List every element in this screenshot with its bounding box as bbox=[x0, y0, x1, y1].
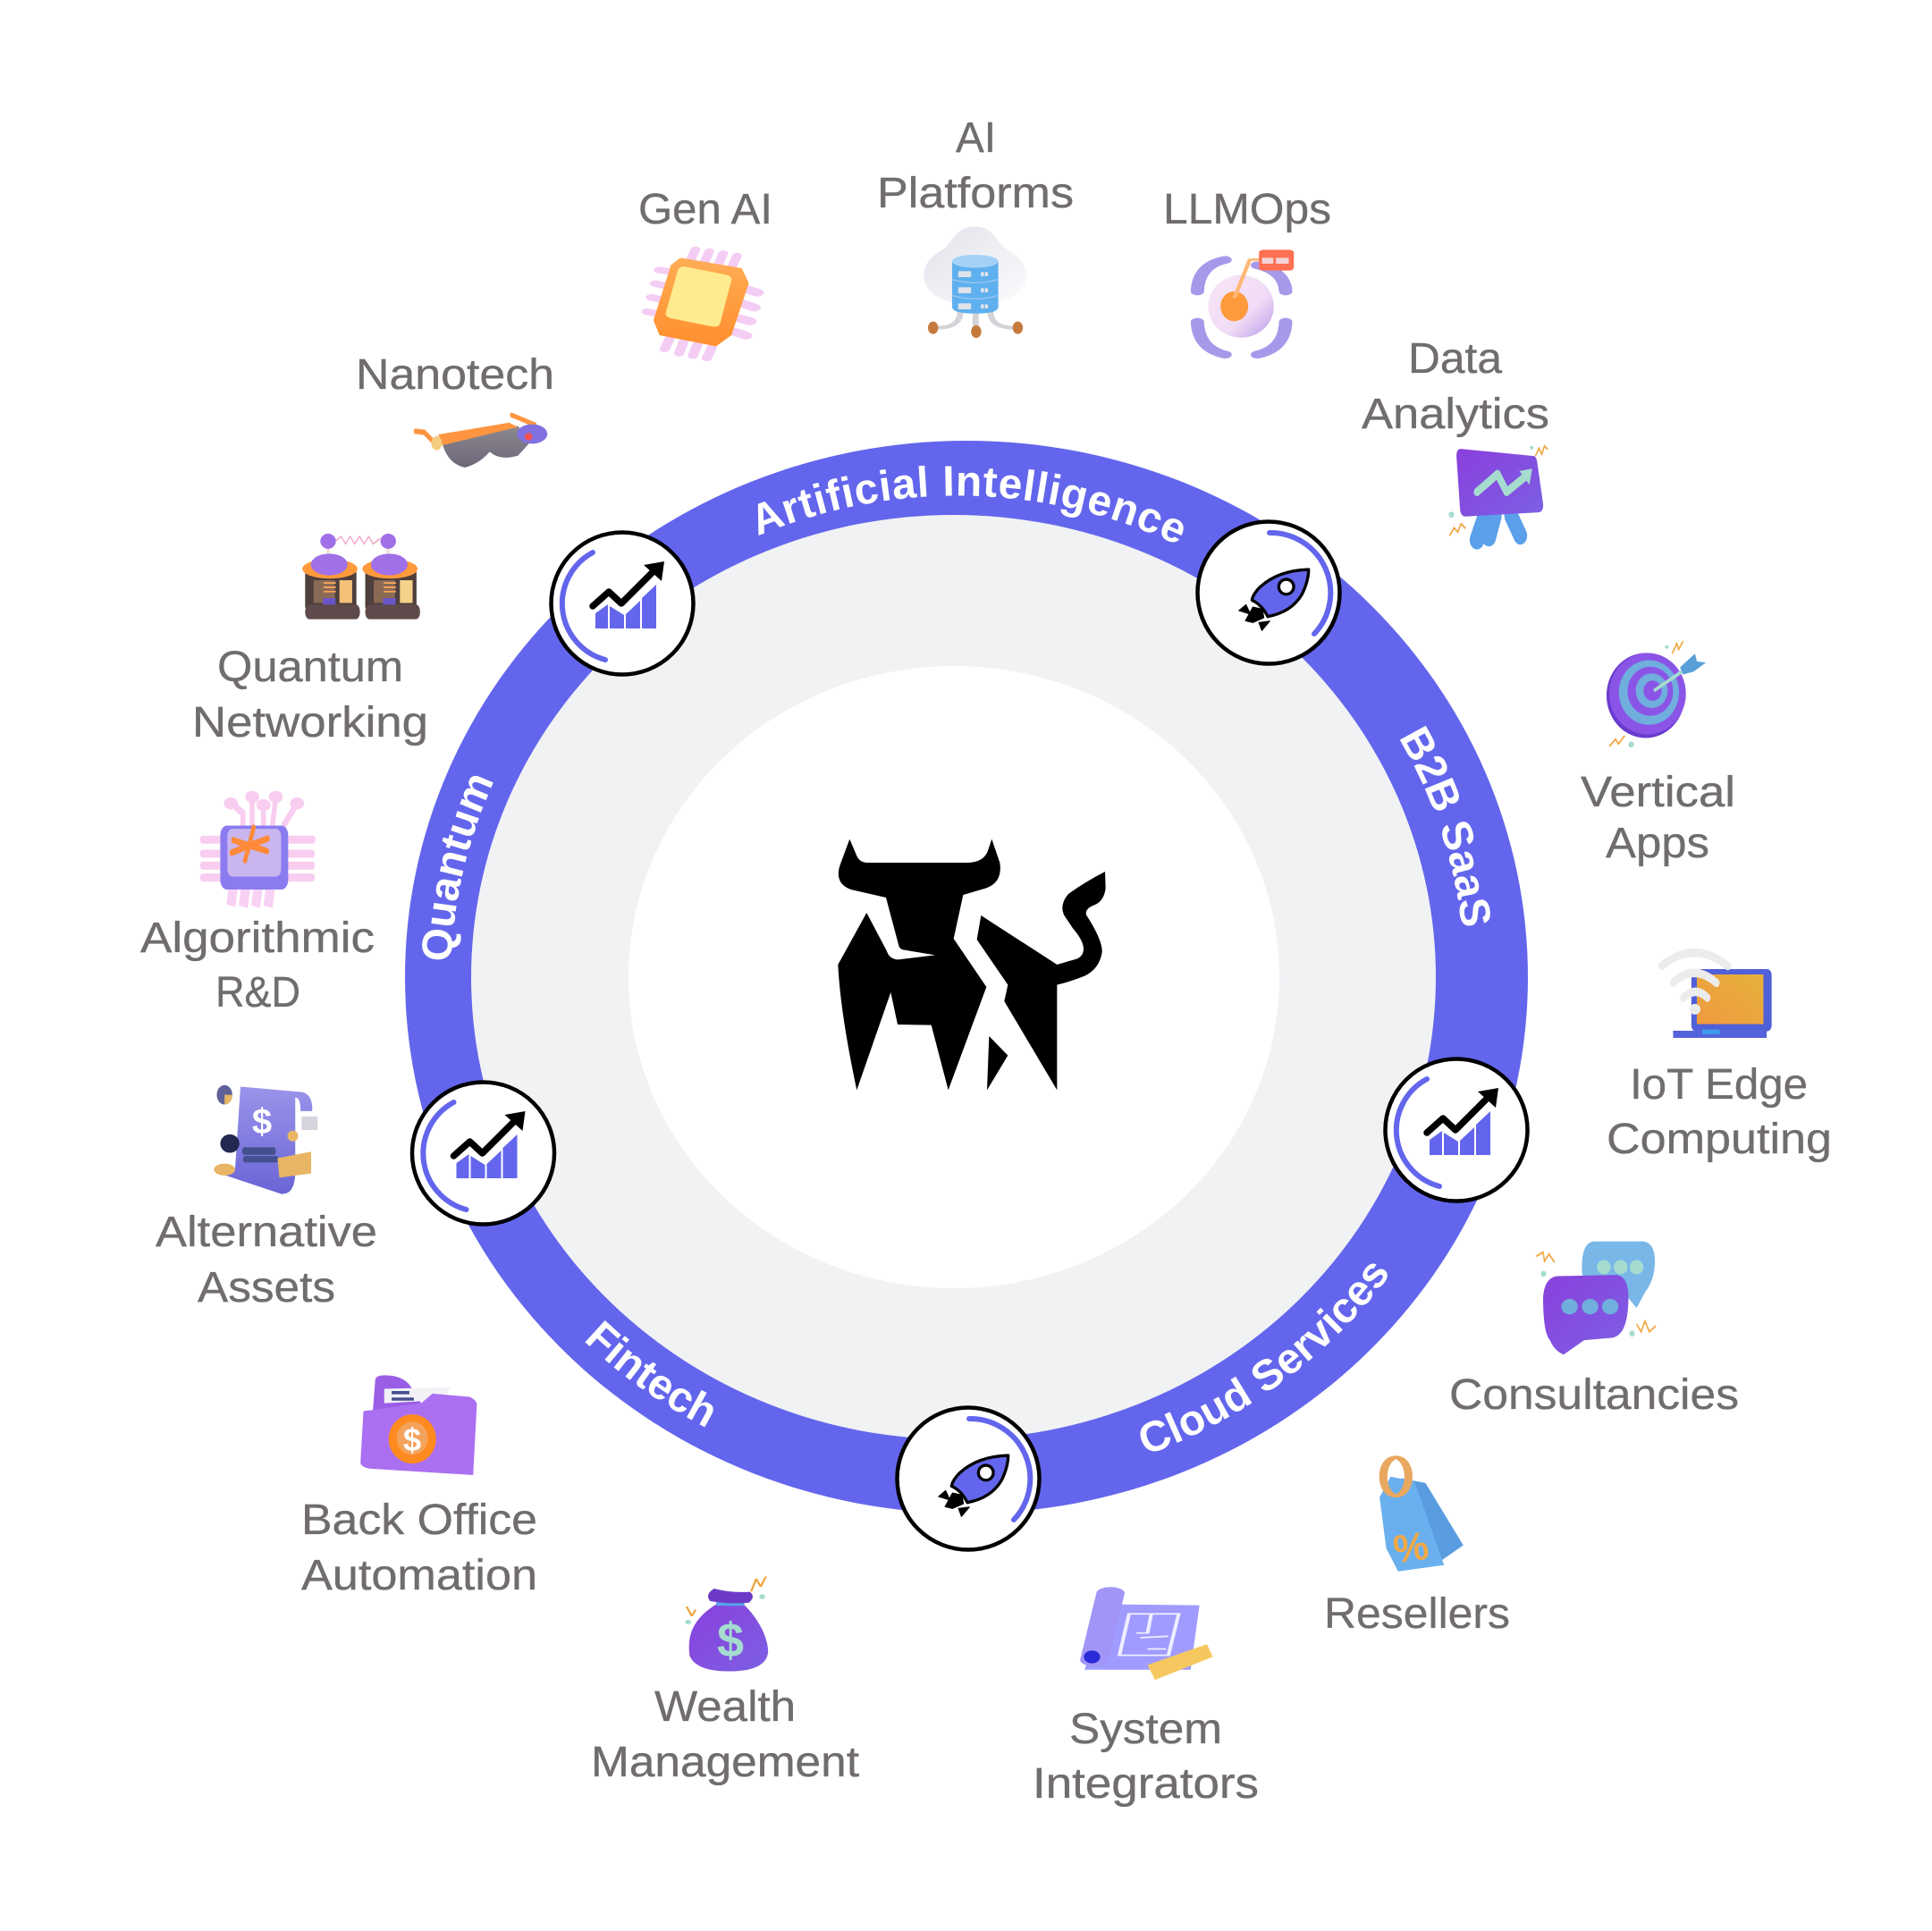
icon: presentation board (Data Analytics) bbox=[1448, 446, 1548, 540]
icon: quantum machines (Quantum Networking) bbox=[302, 534, 420, 620]
label: Quantum Networking: Quantum bbox=[217, 644, 403, 691]
label: IoT Edge Computing: Computing bbox=[1607, 1116, 1832, 1163]
label: Nanotech: Nanotech bbox=[356, 351, 554, 399]
label: Vertical Apps bbox=[1581, 769, 1735, 867]
label: Back Office Automation: Automation bbox=[301, 1552, 537, 1599]
label: AI Platforms: AI bbox=[956, 114, 996, 162]
label: IoT Edge Computing bbox=[1607, 1061, 1832, 1163]
sector ring bbox=[405, 441, 1528, 1510]
icon: invoice scroll (Alternative Assets) bbox=[214, 1085, 317, 1194]
icon: folder (Back Office Automation) bbox=[360, 1375, 477, 1475]
ring label: Cloud Services: Cloud Services bbox=[1141, 1264, 1388, 1452]
label: Quantum Networking: Networking bbox=[192, 699, 428, 746]
icon: price tags (Resellers) bbox=[1379, 1457, 1464, 1572]
badge: growth chart right bbox=[1386, 1058, 1527, 1202]
label: Alternative Assets: Alternative bbox=[156, 1209, 377, 1256]
badge: growth chart top left bbox=[551, 533, 694, 674]
grey inner disc bbox=[471, 515, 1436, 1439]
icon: target lens (LLMOps) bbox=[1197, 249, 1294, 355]
icon: chat bubbles (Consultancies) bbox=[1536, 1242, 1656, 1354]
label: Alternative Assets: Assets bbox=[198, 1264, 335, 1311]
ring label: Artificial Intelligence: Artificial Intelligence bbox=[758, 465, 1184, 542]
label: Resellers: Resellers bbox=[1324, 1590, 1510, 1638]
icon: orange chip (Gen AI) bbox=[647, 249, 757, 358]
label: Algorithmic R&D: Algorithmic bbox=[140, 915, 375, 962]
icon: quantum chip (Algorithmic R&D) bbox=[203, 791, 313, 906]
label: Wealth Management bbox=[591, 1683, 859, 1786]
label: Vertical Apps: Apps bbox=[1606, 820, 1709, 867]
white centre disc bbox=[629, 666, 1279, 1288]
icon: AR glasses (Nanotech) bbox=[416, 415, 547, 468]
label: Data Analytics bbox=[1362, 335, 1549, 438]
ring label: Fintech: Fintech bbox=[585, 1320, 713, 1427]
label: Vertical Apps: Vertical bbox=[1581, 769, 1735, 816]
label: Consultancies: Consultancies bbox=[1449, 1371, 1739, 1419]
ring label: Quantum: Quantum bbox=[422, 776, 494, 960]
label: Data Analytics: Data bbox=[1408, 335, 1502, 383]
label: IoT Edge Computing: IoT Edge bbox=[1630, 1061, 1808, 1109]
label: AI Platforms bbox=[877, 114, 1074, 217]
label: Alternative Assets bbox=[156, 1209, 377, 1311]
icon: money bag (Wealth Management): $ bbox=[717, 1614, 744, 1667]
icon: wifi laptop (IoT Edge Computing) bbox=[1662, 953, 1772, 1038]
logo: bull bbox=[838, 839, 1106, 1090]
label: System Integrators bbox=[1033, 1706, 1259, 1808]
ring band bbox=[405, 441, 1528, 1514]
icon: cloud database (AI Platforms) bbox=[924, 226, 1026, 338]
icon: blueprint (System Integrators) bbox=[1084, 1593, 1213, 1680]
label: Algorithmic R&D: R&D bbox=[215, 969, 300, 1016]
ring label: B2B SaaS: B2B SaaS bbox=[1400, 726, 1490, 926]
label: Algorithmic R&D bbox=[140, 915, 375, 1016]
label: Wealth Management: Management bbox=[591, 1739, 859, 1786]
icon: folder (Back Office Automation): $ bbox=[403, 1421, 421, 1458]
badge: rocket top right bbox=[1198, 522, 1339, 663]
label: AI Platforms: Platforms bbox=[877, 170, 1074, 217]
label: Wealth Management: Wealth bbox=[654, 1683, 796, 1731]
badge: rocket bottom bbox=[898, 1407, 1039, 1550]
label: Data Analytics: Analytics bbox=[1362, 391, 1549, 438]
label: System Integrators: Integrators bbox=[1033, 1760, 1259, 1808]
icon: invoice scroll (Alternative Assets): $ bbox=[252, 1102, 272, 1142]
label: LLMOps: LLMOps bbox=[1163, 186, 1331, 233]
label: Back Office Automation: Back Office bbox=[301, 1497, 537, 1544]
icon: money bag (Wealth Management) bbox=[685, 1576, 768, 1671]
label: System Integrators: System bbox=[1069, 1706, 1222, 1753]
icon: price tags (Resellers): % bbox=[1390, 1524, 1431, 1572]
icon: dartboard (Vertical Apps) bbox=[1607, 641, 1706, 747]
label: Quantum Networking bbox=[192, 644, 428, 746]
label: Back Office Automation bbox=[301, 1497, 537, 1599]
label: Gen AI: Gen AI bbox=[638, 186, 772, 233]
badge: growth chart left bbox=[412, 1082, 554, 1225]
